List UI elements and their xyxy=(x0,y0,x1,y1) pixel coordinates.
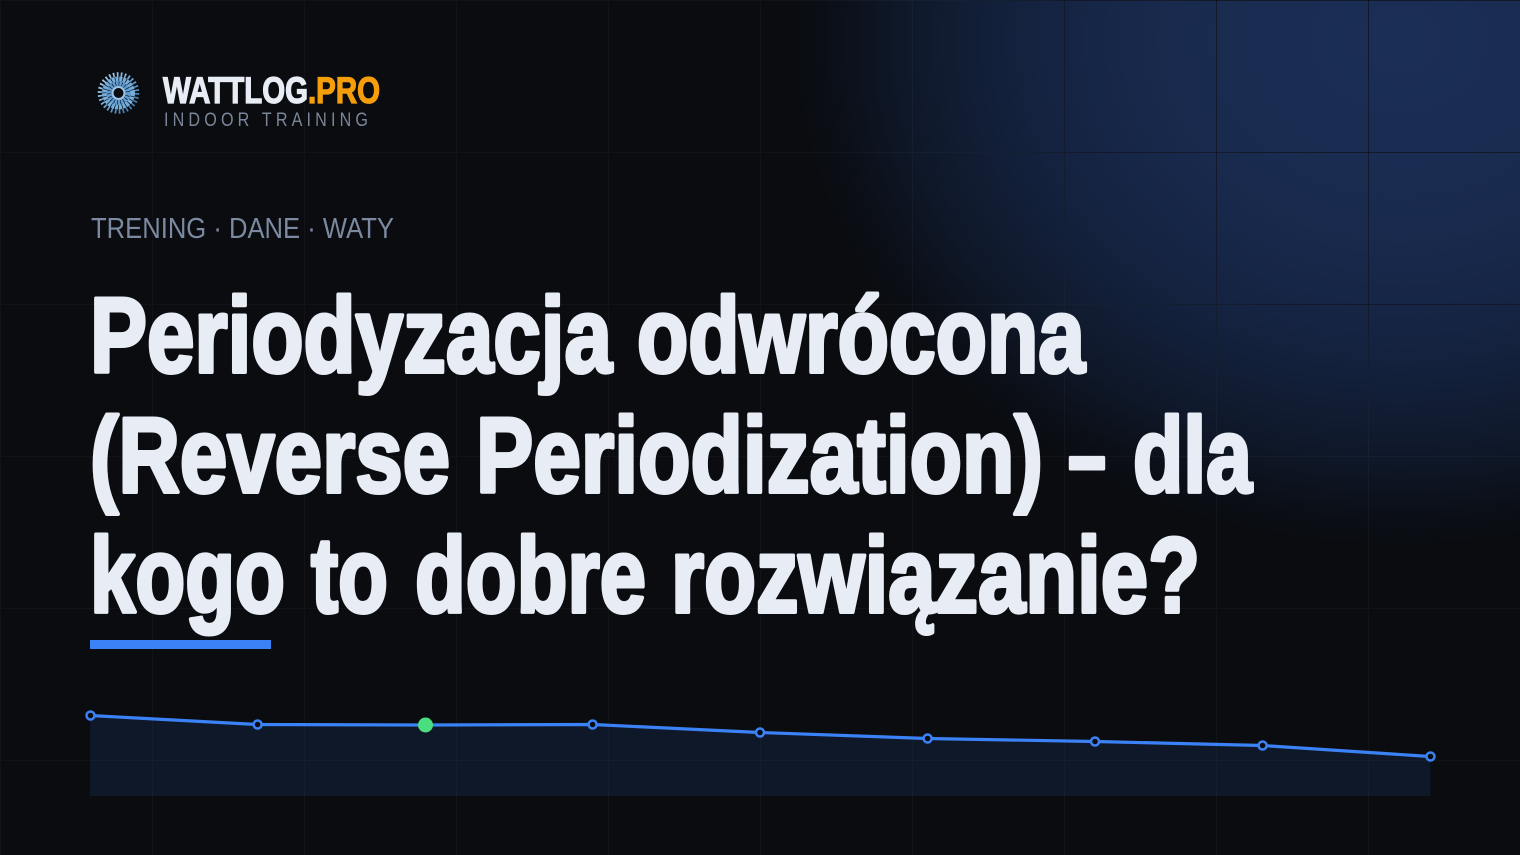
icon: cassette gear xyxy=(100,74,137,112)
logo xyxy=(100,70,380,130)
title underline xyxy=(90,640,271,649)
line chart xyxy=(86,712,1434,796)
title: Periodization) xyxy=(476,395,1043,515)
title xyxy=(90,275,1253,635)
title: kogo xyxy=(90,515,285,635)
chart area xyxy=(90,716,1430,796)
chart points xyxy=(86,712,1434,760)
title: (Reverse xyxy=(90,395,450,515)
title: to xyxy=(311,515,388,635)
title: rozwiązanie? xyxy=(671,515,1200,635)
chart line xyxy=(90,716,1430,756)
title: dobre xyxy=(415,515,646,635)
eyebrow: TRENING · DANE · WATY xyxy=(91,213,394,245)
tagline: INDOOR TRAINING xyxy=(164,109,368,130)
title: odwrócona xyxy=(637,275,1086,395)
title: dla xyxy=(1133,395,1253,515)
title: – xyxy=(1068,395,1106,515)
title: Periodyzacja xyxy=(90,275,613,395)
highlighted point xyxy=(418,718,433,732)
wordmark: WATTLOG.PRO xyxy=(163,70,380,111)
